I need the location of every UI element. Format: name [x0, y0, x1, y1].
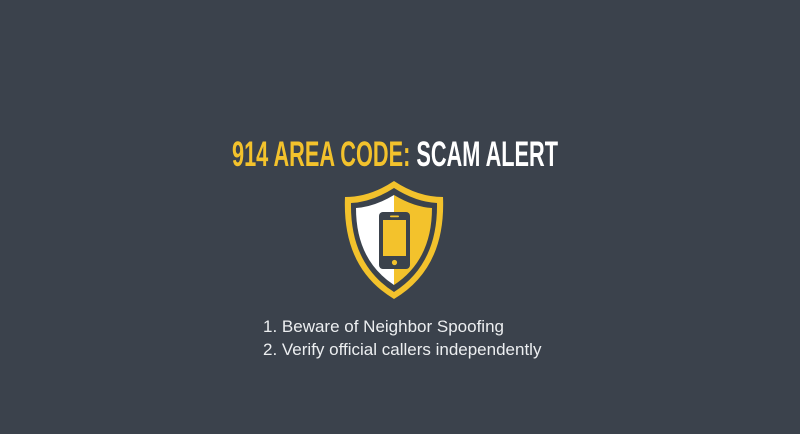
text block: tips list: 1. Beware of Neighbor Spoofing: [263, 317, 504, 336]
icon: phone: [379, 212, 410, 269]
icon: shield with phone: [345, 181, 443, 299]
text block: tips list: 2. Verify official callers independently: [263, 340, 542, 359]
text block: tips list: [263, 317, 542, 359]
title: 914 AREA CODE: SCAM ALERT: [232, 135, 558, 174]
